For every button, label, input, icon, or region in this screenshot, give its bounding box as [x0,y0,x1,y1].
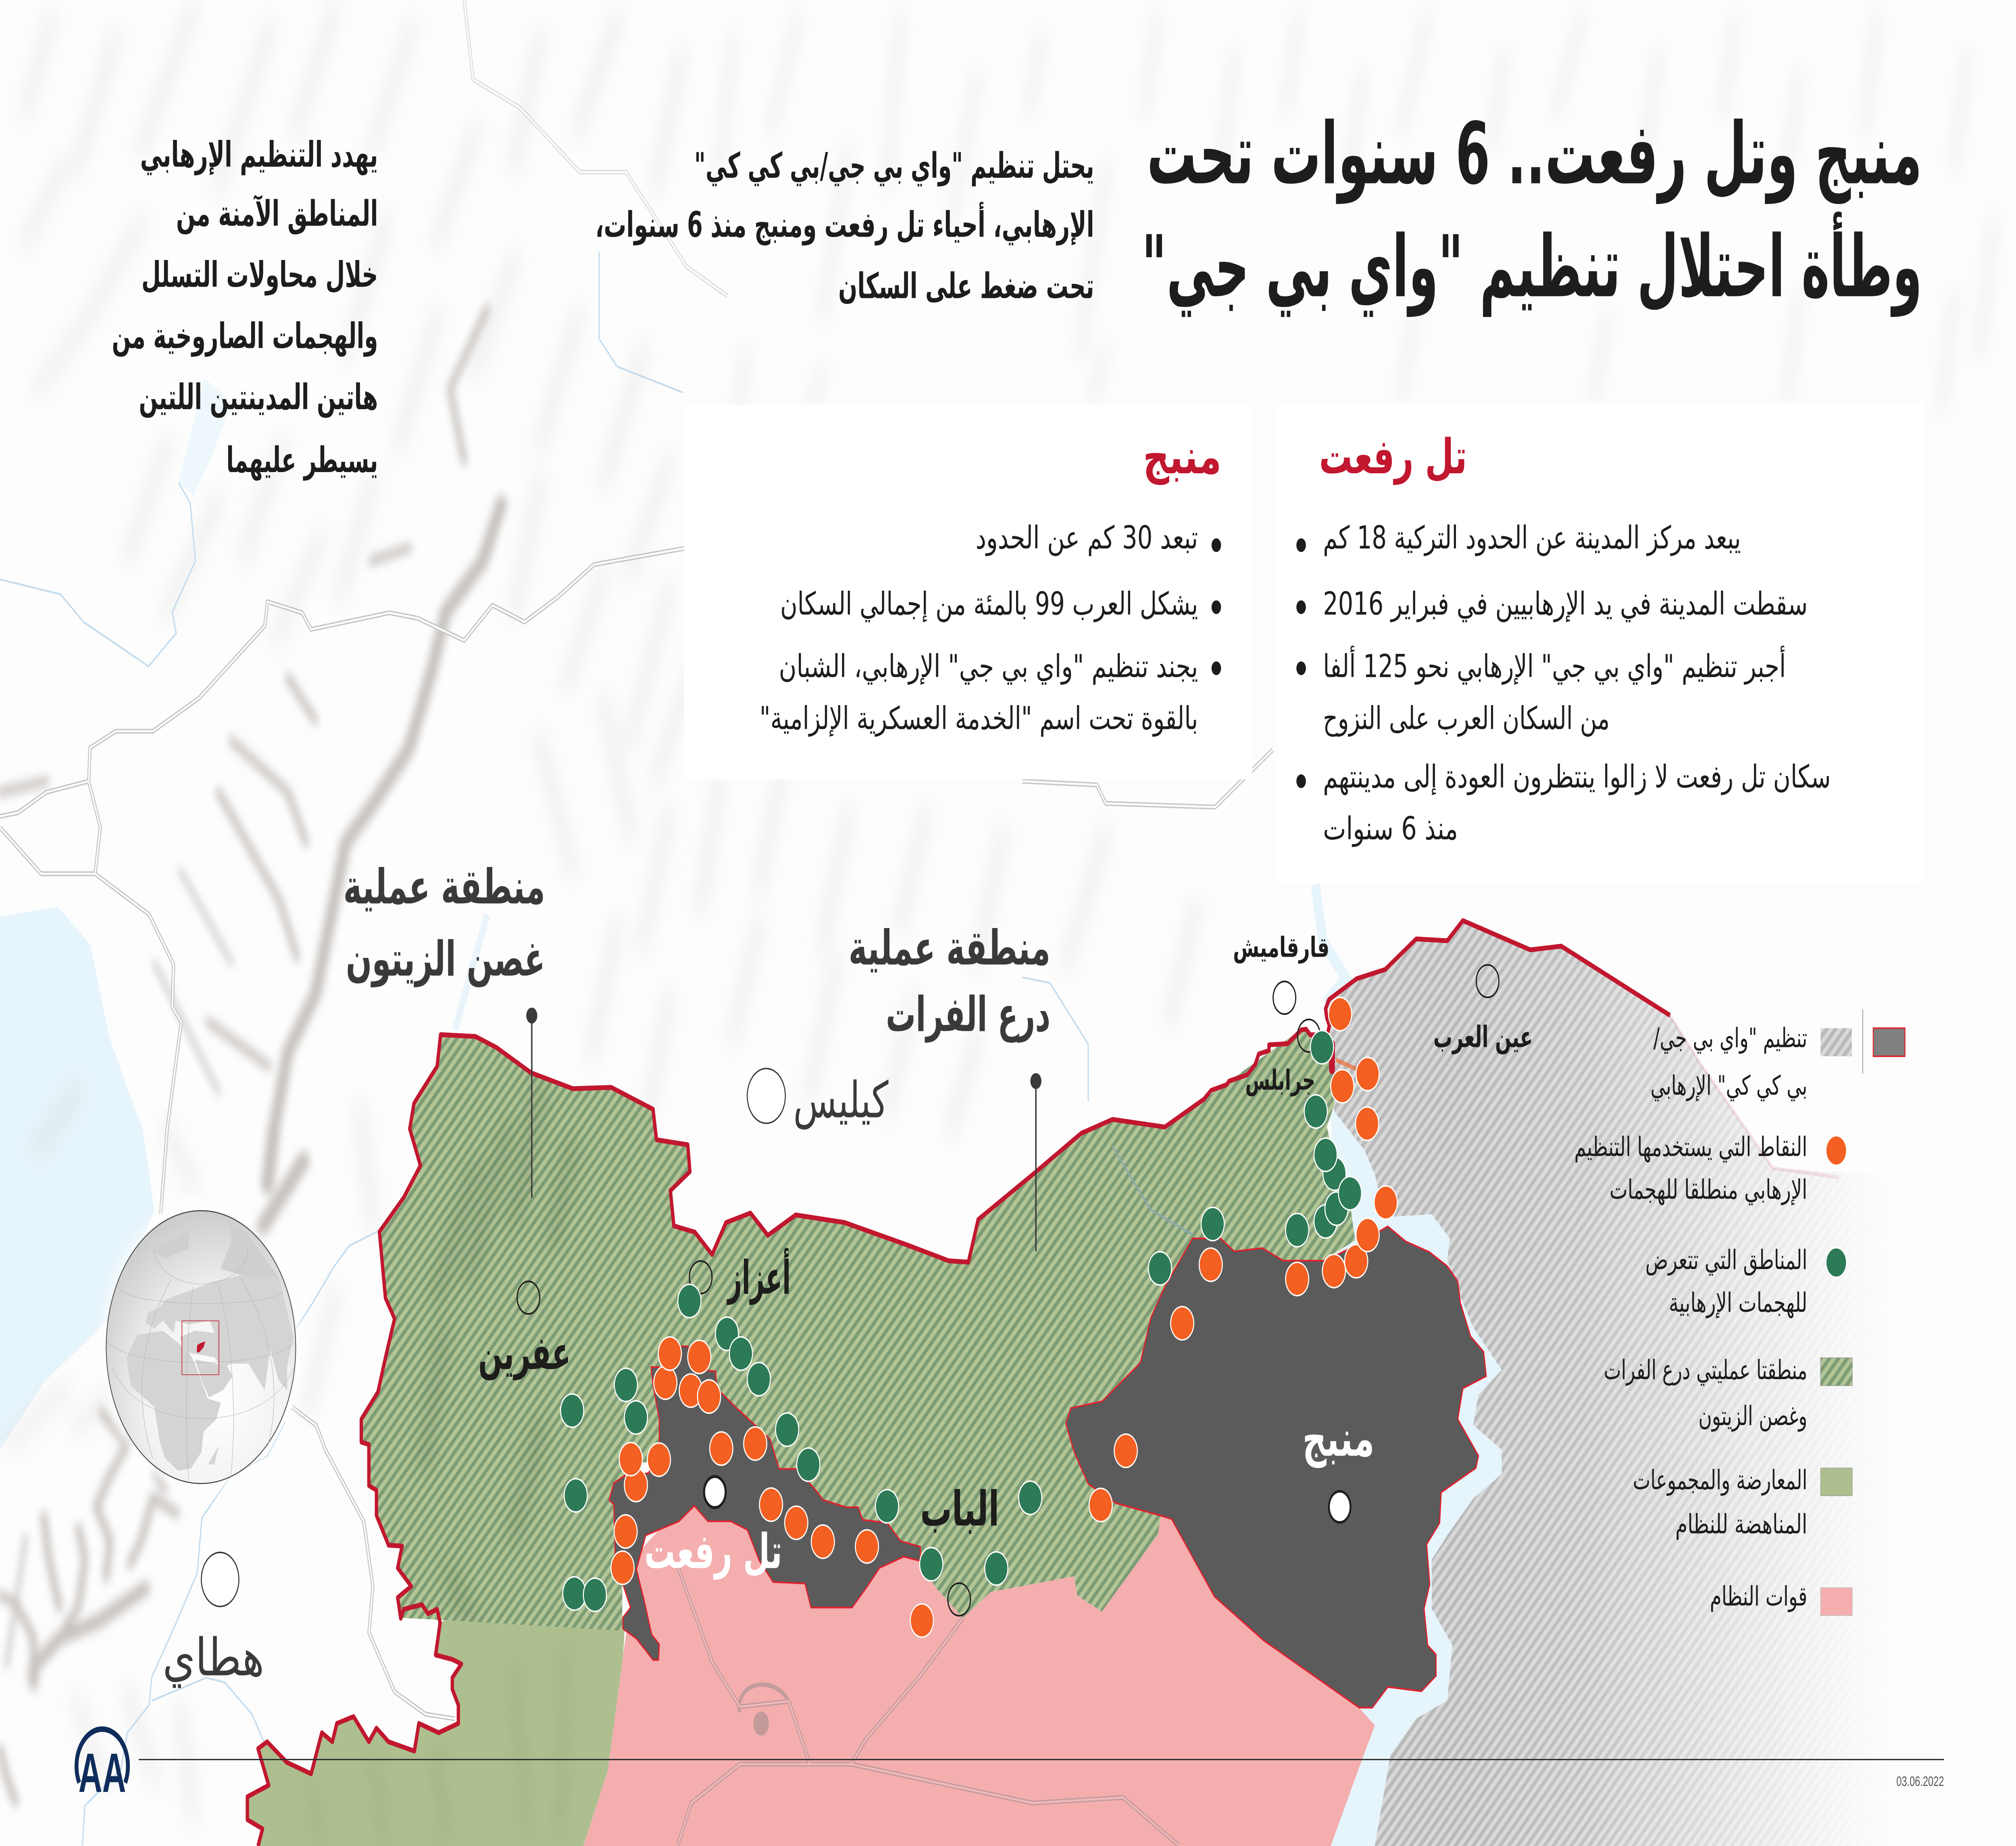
intro text [595,145,1094,306]
terrain: mountain ridges [0,309,502,1801]
legend: للهجمات الإرهابية [1669,1287,1807,1319]
bullet list: أجبر تنظيم "واي بي جي" الإرهابي نحو 125 ألفا [1323,646,1786,685]
region: regime forces (pink) [583,1490,1375,1846]
heading: Manbij: منبج [1143,429,1221,485]
bullet list: سكان تل رفعت لا زالوا ينتظرون العودة إلى مدينتهم [1323,758,1831,795]
region: opposition groups (solid green) [248,1611,625,1846]
leader line: Olive Branch [526,1007,537,1198]
bullet list: يبعد مركز المدينة عن الحدود التركية 18 كم [1323,520,1741,556]
city names: عفرين [478,1326,571,1380]
operation zone label: Euphrates Shield: منطقة عملية [849,920,1050,976]
bullet list: تبعد 30 كم عن الحدود [976,520,1198,556]
legend: الإرهابي منطلقا للهجمات [1610,1174,1807,1206]
bullet list: سقطت المدينة في يد الإرهابيين في فبراير 2016 [1323,585,1808,622]
city markers [201,965,1499,1616]
locator globe [102,1205,300,1490]
legend: المعارضة والمجموعات [1633,1465,1807,1496]
terrain: faint relief [13,9,1196,1814]
threat text: يهدد التنظيم الإرهابي [140,134,378,175]
city names: جرابلس [1245,1064,1315,1097]
Turkish border line [248,921,1839,1846]
operation zone label: Olive Branch: غصن الزيتون [346,932,545,987]
legend: بي كي كي" الإرهابي [1650,1070,1807,1102]
legend: وغصن الزيتون [1698,1400,1807,1432]
city names: هطاي [162,1627,264,1688]
terrain: very faint upper right streaks [720,19,1993,463]
region: Tal Rifaat area under YPG (dark) [609,1346,921,1660]
city names: الباب [920,1482,999,1537]
bullet list [1296,520,1831,847]
threat text [112,134,378,481]
footer line [139,1759,1944,1760]
threat text: يسيطر عليهما [226,439,378,481]
Euphrates river [1331,1107,1502,1846]
heading: Tal Rifaat: تل رفعت [1319,429,1467,485]
panel: Manbij [684,405,1252,779]
region: YPG/PKK east of Euphrates (grey hatch) [1326,923,1838,1846]
bullet list: منذ 6 سنوات [1323,810,1458,847]
legend: منطقتا عمليتي درع الفرات [1604,1354,1807,1386]
legend: تنظيم "واي بي جي/ [1654,1022,1807,1054]
logo: AA: AA [79,1742,126,1804]
city names: قارقاميش [1233,931,1329,964]
operation zone label: Olive Branch [343,860,545,987]
region: Manbij area under YPG (dark) [1066,1226,1486,1708]
title [1142,104,1922,317]
bullet list: من السكان العرب على النزوح [1323,700,1610,737]
threat text: خلال محاولات التسلل [142,254,378,296]
city names [162,931,1533,1688]
bullet list: بالقوة تحت اسم "الخدمة العسكرية الإلزامية" [760,700,1198,737]
city names: كيليس [793,1072,889,1130]
operation zone label: Olive Branch: منطقة عملية [343,860,545,915]
road network [0,0,1273,1719]
legend: المناهضة للنظام [1675,1509,1807,1540]
leader line: Euphrates Shield [1030,1073,1041,1251]
legend: قوات النظام [1710,1581,1807,1612]
bullet list [760,520,1221,737]
threat text: المناطق الآمنة من [176,193,378,235]
threat text: والهجمات الصاروخية من [112,315,378,357]
date: 03.06.2022 [1896,1774,1944,1789]
intro text: الإرهابي، أحياء تل رفعت ومنبج منذ 6 سنوات، [595,202,1094,246]
city names: أعزاز [727,1247,791,1305]
intro text: يحتل تنظيم "واي بي جي/بي كي كي" [694,145,1094,187]
points under attack (green) [560,1030,1362,1611]
title: منبج وتل رفعت.. 6 سنوات تحت [1147,104,1922,204]
region: Euphrates Shield and Olive Branch operation zones (hatched) [361,1029,1355,1631]
operation zone label: Euphrates Shield [849,920,1050,1043]
panel: Tal Rifaat [1278,404,1923,883]
terrain over operation zones [424,1092,1193,1620]
road network in regime area [677,1566,1179,1846]
operation zone label: Euphrates Shield: درع الفرات [886,987,1050,1043]
city names: تل رفعت [644,1524,782,1580]
city names: عين العرب [1433,1020,1533,1054]
legend: النقاط التي يستخدمها التنظيم [1574,1131,1807,1163]
legend: المناطق التي تتعرض [1645,1245,1807,1276]
intro text: تحت ضغط على السكان [838,265,1094,306]
sea [0,907,154,1449]
terrain over opposition area [308,1648,566,1842]
bullet list: يجند تنظيم "واي بي جي" الإرهابي، الشبان [779,648,1198,685]
threat text: هاتين المدينتين اللتين [139,376,378,418]
bullet list: يشكل العرب 99 بالمئة من إجمالي السكان [780,585,1198,622]
launch points used by the organisation (orange) [611,997,1397,1637]
lakes and rivers [0,252,1346,1846]
city names: منبج [1302,1410,1375,1468]
legend [1574,1009,1905,1615]
